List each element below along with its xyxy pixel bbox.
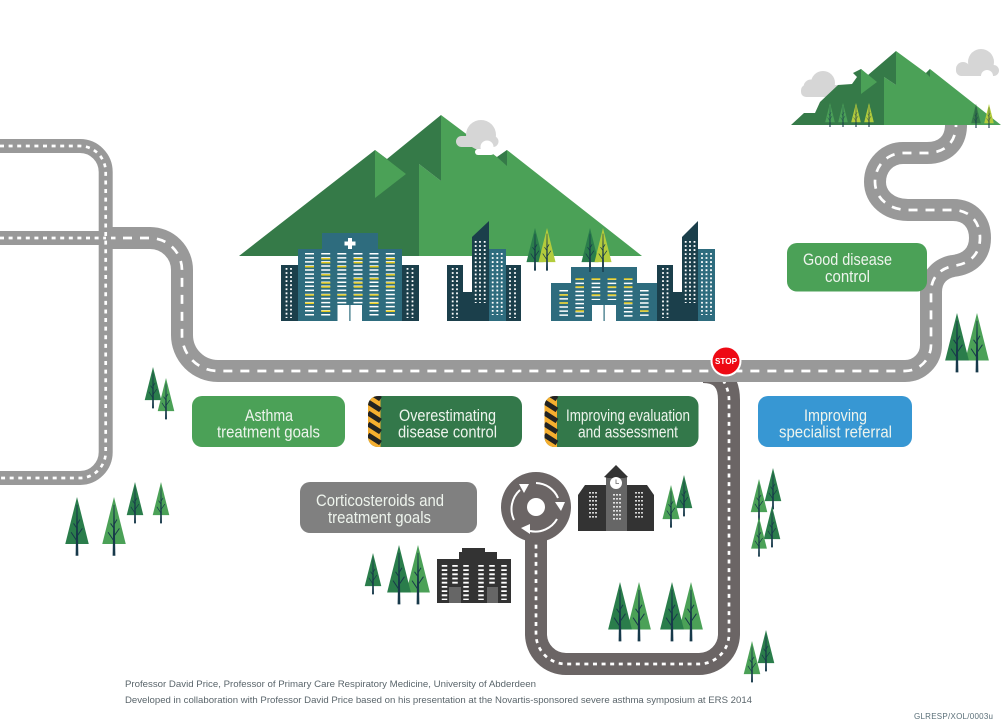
label: improving evaluation and assessment	[544, 396, 698, 447]
road: thin upper-left loop	[0, 146, 106, 478]
hospital building	[281, 233, 419, 321]
city building group	[447, 221, 521, 321]
road: dark branch to roundabout	[536, 372, 729, 664]
label: overestimating disease control: disease control	[398, 422, 497, 442]
trees: left lower cluster	[65, 482, 169, 556]
label: good disease control: Good disease	[803, 250, 892, 269]
road: main route	[111, 125, 980, 371]
roundabout	[501, 472, 571, 542]
small mountain with clouds	[791, 49, 1001, 128]
school building	[578, 465, 654, 531]
trees: beside office building	[365, 545, 430, 604]
cloud: large mountain	[456, 120, 498, 155]
label: good disease control	[787, 243, 927, 292]
label: corticosteroids and treatment goals: Corticosteroids and	[316, 491, 444, 510]
trees: inside road loop	[608, 582, 703, 641]
footer credits: Developed in collaboration with Professor David Price based on his presentation at the Novartis-sponsored severe asthma symposium at ERS 2014	[125, 694, 752, 705]
footer credits	[125, 678, 752, 705]
label: improving specialist referral: specialist referral	[779, 422, 892, 442]
trees: right of main road	[945, 313, 989, 372]
trees behind buildings	[526, 228, 612, 271]
trees: right of dark road	[751, 468, 781, 557]
label: asthma treatment goals: treatment goals	[217, 422, 320, 442]
label: improving evaluation and assessment: Improving evaluation	[566, 406, 690, 425]
mixed building group	[551, 221, 715, 321]
label: improving specialist referral: Improving	[804, 406, 867, 425]
label: overestimating disease control	[368, 396, 522, 447]
office building	[437, 548, 511, 603]
label: good disease control: control	[825, 267, 870, 286]
footer credits: Professor David Price, Professor of Primary Care Respiratory Medicine, University of Abderdeen	[125, 678, 536, 689]
stop sign: STOP	[715, 356, 737, 366]
trees: bottom right	[744, 630, 774, 682]
label: improving specialist referral	[758, 396, 912, 447]
trees: beside asthma label	[145, 367, 174, 419]
label: overestimating disease control: Overestimating	[399, 406, 496, 425]
large mountain	[239, 115, 642, 256]
label: corticosteroids and treatment goals: treatment goals	[328, 508, 431, 527]
label: improving evaluation and assessment: and assessment	[578, 422, 678, 442]
stop sign	[710, 346, 742, 376]
label: asthma treatment goals: Asthma	[245, 406, 293, 425]
label: corticosteroids and treatment goals	[300, 482, 477, 533]
label: asthma treatment goals	[192, 396, 345, 447]
trees: beside school	[662, 475, 692, 528]
